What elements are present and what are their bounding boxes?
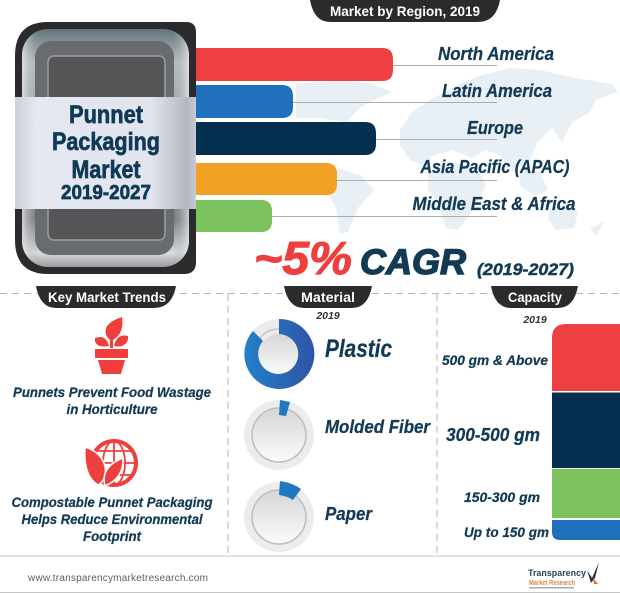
icon: punnet tray [15,22,196,274]
header: key market trends [36,286,176,308]
region labels: Europe [467,118,523,138]
region labels: Middle East & Africa [412,194,576,214]
label: molded fiber: Molded Fiber [325,417,431,437]
year label: material: 2019 [315,310,340,322]
donut: molded fiber [244,400,314,470]
trend text: food wastage: Punnets Prevent Food Wastage [13,384,211,400]
capacity labels: 300-500 gm [446,425,540,445]
title band: 2019-2027 [61,182,151,204]
capacity labels [442,352,549,540]
website url: www.transparencymarketresearch.com [27,573,208,584]
capacity labels: Up to 150 gm [464,524,549,540]
icon: globe and leaves [85,441,136,486]
header: material [284,286,372,308]
logo: transparency market research: Market Research [529,580,575,587]
title band: Market [72,156,141,184]
year label: capacity: 2019 [522,314,547,326]
trend text: compostable: Footprint [83,528,142,544]
header: market by region: Market by Region, 2019 [330,3,480,19]
trend text: food wastage [13,384,211,417]
header: key market trends: Key Market Trends [48,289,166,305]
capacity labels: 150-300 gm [464,489,540,505]
header: capacity: Capacity [508,289,562,305]
title band: Packaging [52,128,160,156]
label: paper: Paper [325,504,373,524]
trend text: compostable: Compostable Punnet Packaging [12,494,213,510]
donut: plastic [244,319,314,389]
trend text: compostable: Helps Reduce Environmental [22,511,204,527]
stacked bar: capacity [552,324,620,540]
trend text: compostable [12,494,213,544]
label: plastic: Plastic [325,335,392,363]
CAGR callout: ~5% [254,232,352,284]
CAGR callout: (2019-2027) [477,261,575,279]
header: material: Material [301,289,355,305]
bar chart: market by region [196,48,497,232]
CAGR callout [254,232,575,284]
header: capacity [491,286,578,308]
header: market by region [310,0,500,22]
donut: paper [244,481,314,552]
logo: transparency market research: Transparency [528,568,587,579]
region labels [412,44,576,214]
title band: Punnet [69,101,144,129]
region labels: North America [438,44,554,64]
logo: transparency market research [528,562,599,588]
region labels: Asia Pacific (APAC) [420,157,570,177]
icon: plant in pot [95,317,128,374]
world map background [296,68,618,236]
CAGR callout: CAGR [360,243,467,282]
capacity labels: 500 gm & Above [442,352,548,368]
title band [15,97,196,209]
region labels: Latin America [442,81,552,101]
trend text: food wastage: in Horticulture [66,401,158,417]
